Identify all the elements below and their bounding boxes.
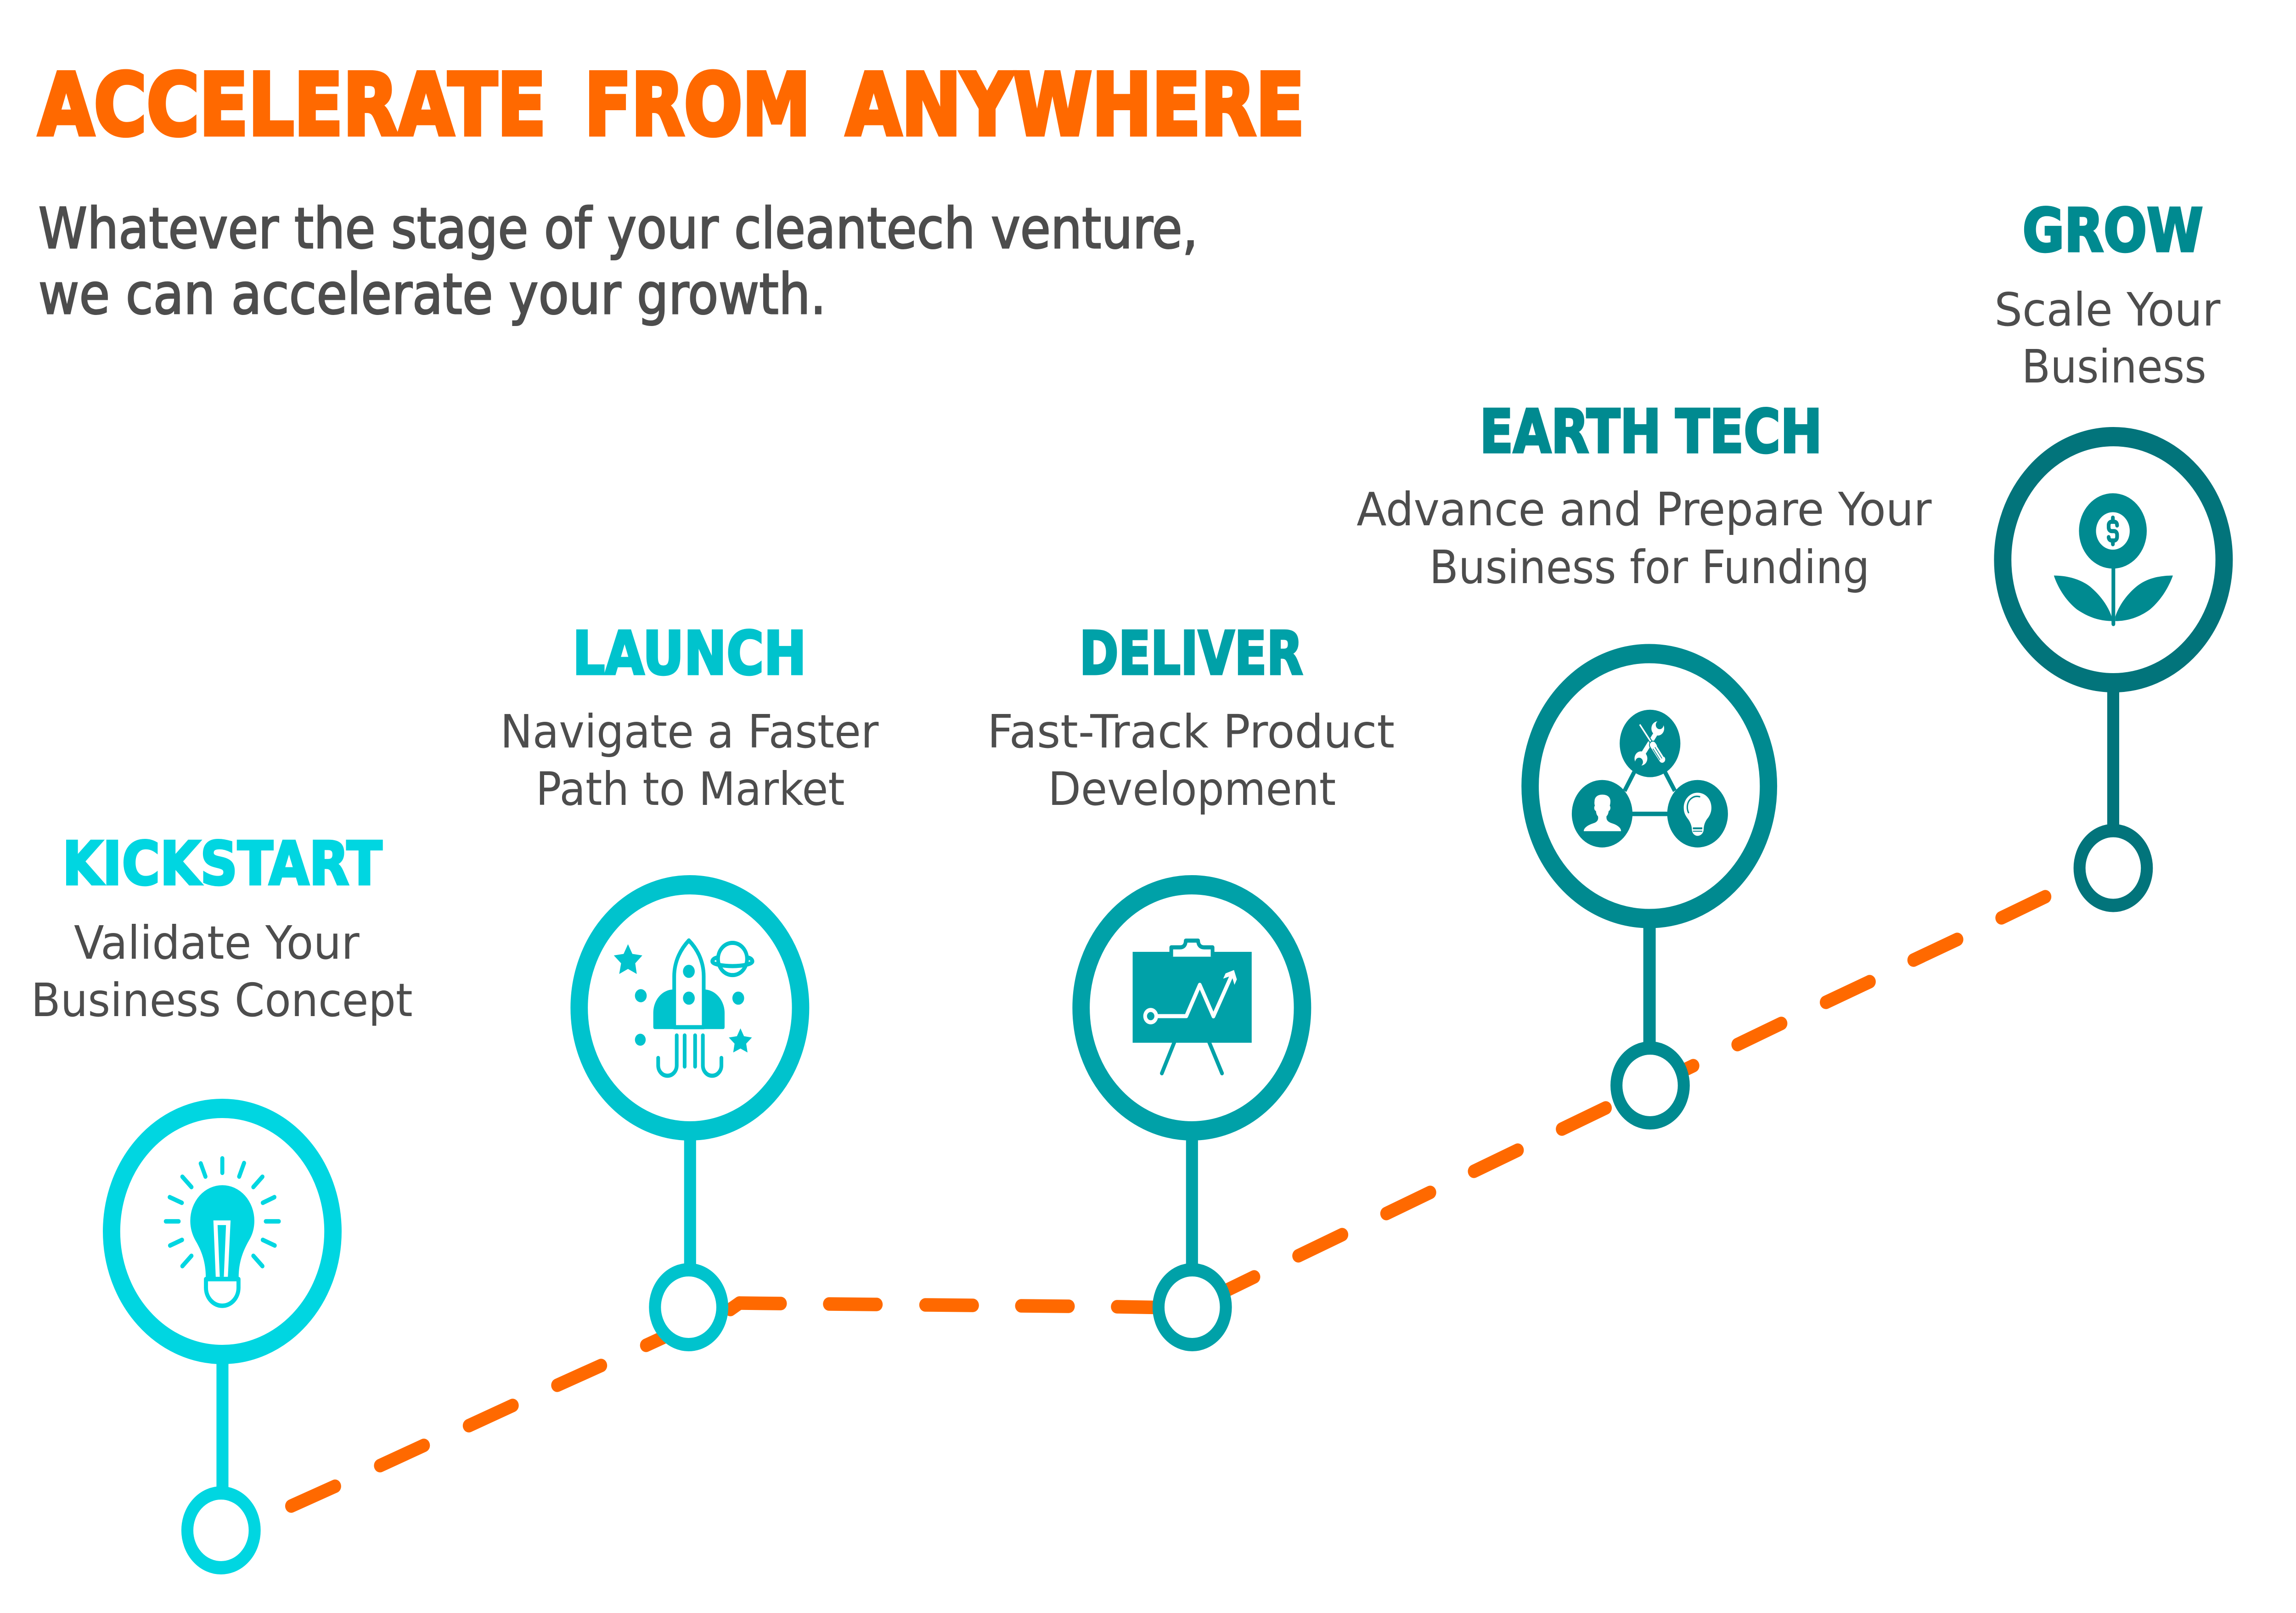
milestone node: Earth Tech — [1616, 1048, 1684, 1123]
dashed growth path — [291, 897, 2045, 1506]
heading: Grow: GROW — [2022, 196, 2203, 266]
heading: Launch: LAUNCH — [573, 619, 806, 689]
description: Kickstart: Validate Your — [74, 917, 360, 970]
ring: Deliver — [1081, 885, 1302, 1131]
connector stem: Earth Tech — [1643, 923, 1656, 1047]
icon detail: person — [1584, 795, 1621, 831]
title — [39, 56, 1305, 155]
icon: rocket — [614, 940, 753, 1076]
icon detail: idea bulb — [1684, 793, 1711, 836]
heading: Earth Tech: TECH — [1676, 397, 1822, 467]
subtitle: we can accelerate your growth. — [39, 262, 826, 327]
connector stem: Kickstart — [216, 1359, 228, 1492]
milestone node: Deliver — [1159, 1270, 1226, 1344]
description: Launch: Path to Market — [536, 763, 845, 816]
icon: connected team, tools and idea — [1572, 710, 1728, 848]
description: Deliver — [987, 706, 1395, 816]
description: Launch — [500, 706, 879, 816]
title: FROM — [585, 56, 810, 155]
title: ACCELERATE — [39, 56, 546, 155]
connector stem: Deliver — [1186, 1134, 1198, 1267]
subtitle — [39, 197, 1198, 327]
milestone node: Kickstart — [187, 1493, 255, 1568]
stage: Earth Tech — [1356, 397, 1932, 1123]
heading: Deliver: DELIVER — [1080, 619, 1303, 689]
icon: money plant — [2054, 493, 2173, 624]
ring: Grow — [2003, 437, 2224, 683]
heading: Earth Tech: EARTH — [1480, 397, 1661, 467]
description: Deliver: Development — [1048, 763, 1336, 816]
stage: Grow — [1994, 196, 2224, 905]
description: Kickstart — [31, 917, 413, 1027]
stage: Deliver — [987, 619, 1395, 1344]
connector stem: Grow — [2107, 686, 2119, 829]
stage: Kickstart — [31, 829, 413, 1568]
description: Kickstart: Business Concept — [31, 974, 413, 1027]
description: Grow: Business — [2022, 341, 2206, 393]
icon detail: crossed wrench and screwdriver — [1634, 720, 1664, 766]
connector stem: Launch — [684, 1134, 696, 1267]
description: Grow: Scale Your — [1994, 284, 2221, 337]
ring: Earth Tech — [1530, 654, 1768, 918]
description: Earth Tech — [1356, 483, 1932, 594]
ring: Launch — [579, 885, 800, 1131]
title: ANYWHERE — [846, 56, 1305, 155]
icon: light bulb — [166, 1158, 279, 1306]
milestone node: Grow — [2080, 831, 2147, 905]
heading: Kickstart: KICKSTART — [62, 829, 382, 899]
heading: Earth Tech — [1480, 397, 1822, 467]
subtitle: Whatever the stage of your cleantech venture, — [39, 197, 1198, 261]
stage: Launch — [500, 619, 879, 1344]
ring: Kickstart — [112, 1108, 333, 1354]
description: Earth Tech: Business for Funding — [1429, 541, 1870, 594]
description: Deliver: Fast-Track Product — [987, 706, 1395, 759]
description: Earth Tech: Advance and Prepare Your — [1356, 483, 1932, 536]
description: Grow — [1994, 284, 2221, 393]
description: Launch: Navigate a Faster — [500, 706, 879, 759]
icon: presentation board — [1133, 941, 1252, 1073]
milestone node: Launch — [655, 1270, 722, 1344]
